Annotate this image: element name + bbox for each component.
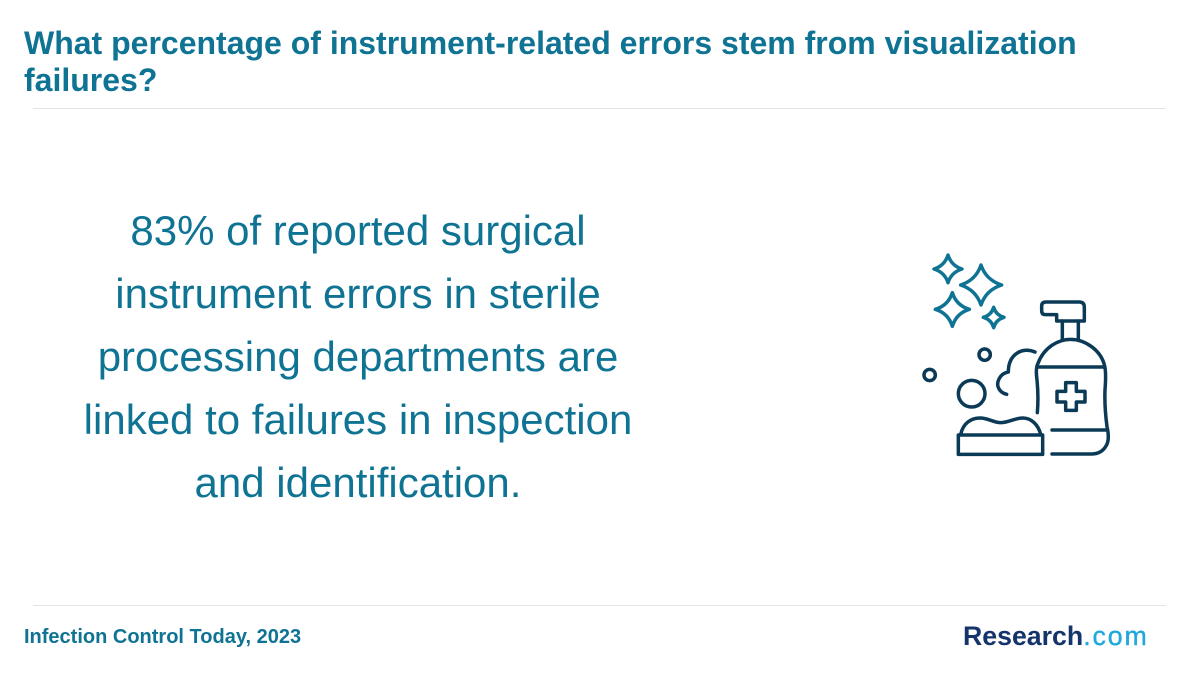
icon: sponge: [958, 418, 1043, 454]
icon: soap bottle, sponge and sparkles: [922, 253, 1110, 456]
main statement text: 83% of reported surgical: [130, 207, 586, 254]
icon: foam cloud: [998, 350, 1035, 394]
icon: bubbles: [924, 349, 990, 407]
main statement text: processing departments are: [98, 333, 618, 380]
main statement text: linked to failures in inspection: [84, 396, 632, 443]
icon: sparkles: [934, 255, 1004, 328]
icon: bottle: [1036, 302, 1108, 454]
title: What percentage of instrument-related errors stem from visualization failures?: [24, 25, 1077, 98]
source citation: Infection Control Today, 2023: [24, 626, 301, 648]
main statement text: and identification.: [195, 459, 521, 506]
main statement text: instrument errors in sterile: [115, 270, 601, 317]
logo: Research.com: Research.com: [963, 621, 1149, 651]
main statement text: [84, 207, 632, 506]
